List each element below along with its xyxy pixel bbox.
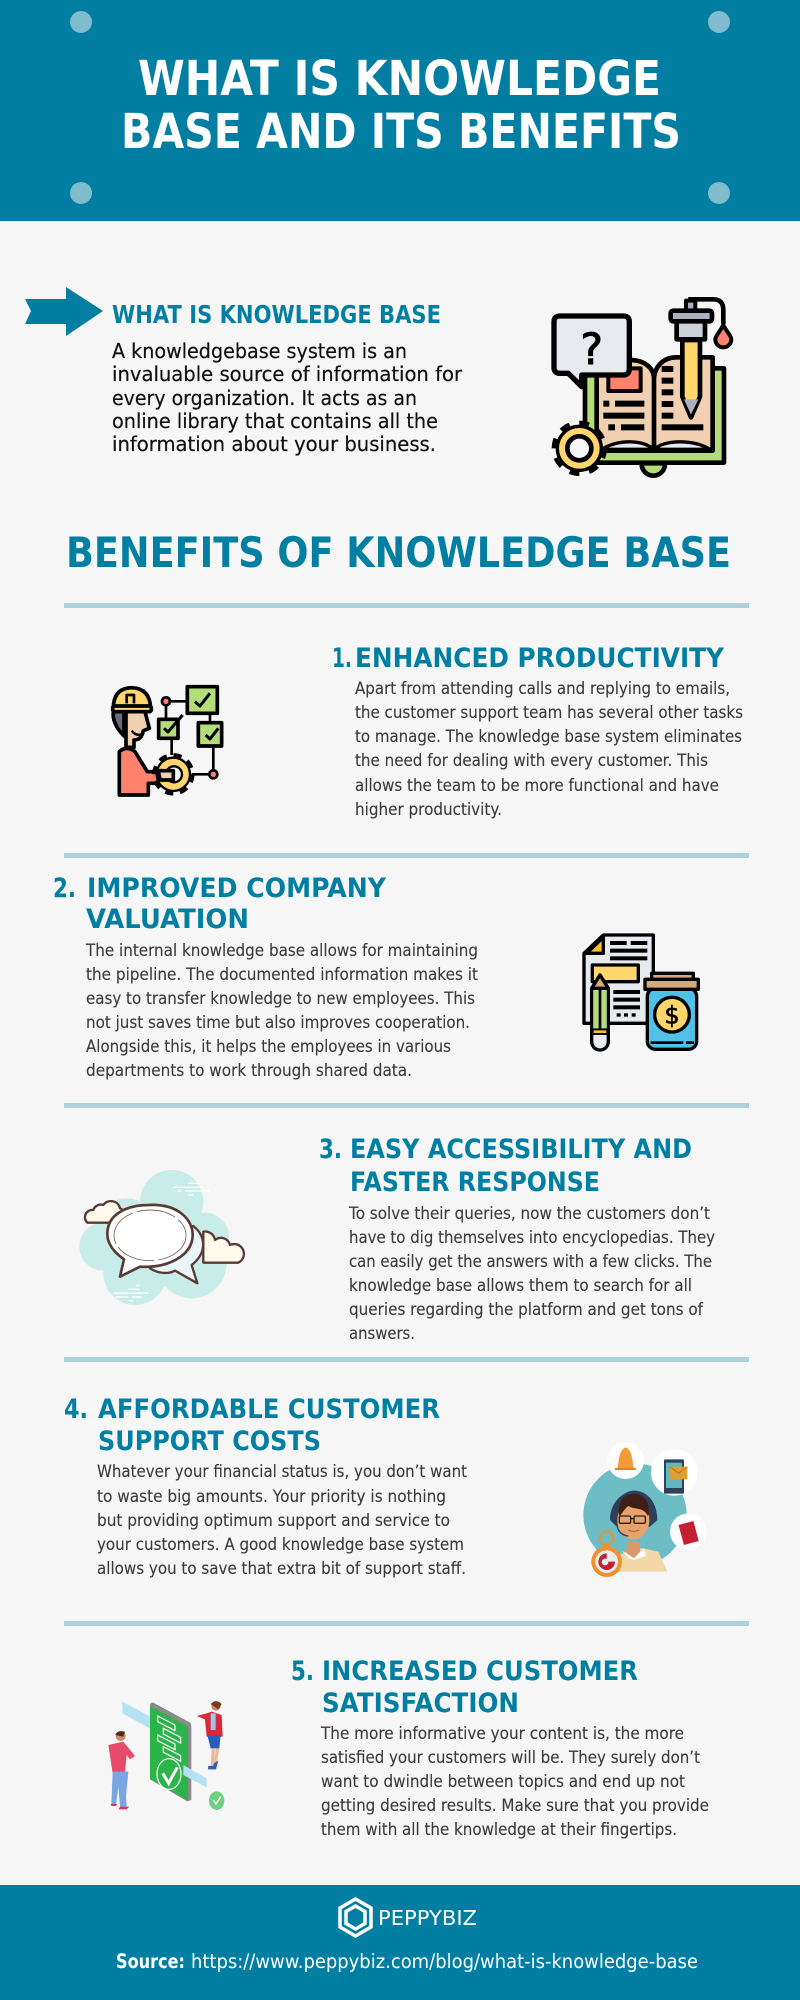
panel: what is knowledge base (25, 287, 731, 476)
benefit 3 text: queries regarding the platform and get tons of (349, 1300, 704, 1320)
icon: document, pencil and coffee cup: $ (664, 1001, 680, 1029)
header banner (0, 0, 800, 221)
panel: benefit 2 (53, 873, 698, 1081)
benefit 1 text: Apart from attending calls and replying to emails, (355, 679, 730, 699)
benefit 5 heading: 5. (291, 1656, 314, 1687)
benefit 1 heading: ENHANCED PRODUCTIVITY (355, 643, 725, 674)
benefit 2 heading (53, 873, 387, 935)
benefit 3 heading (319, 1134, 692, 1198)
title (121, 51, 681, 160)
title: BASE AND ITS BENEFITS (121, 104, 681, 160)
intro heading: WHAT IS KNOWLEDGE BASE (112, 300, 441, 329)
icon: document, pencil and coffee cup (584, 935, 698, 1050)
benefit 3 heading: 3. (319, 1134, 342, 1165)
icon: open book with pen and question: ? (580, 325, 603, 375)
benefit 5 heading: INCREASED CUSTOMER (322, 1656, 638, 1687)
icon: support agent with headset (583, 1442, 707, 1577)
benefit 4 heading: SUPPORT COSTS (98, 1426, 321, 1457)
benefit 1 text: to manage. The knowledge base system eliminates (355, 727, 742, 747)
benefit 1 text: higher productivity. (355, 800, 502, 820)
benefit 2 text: departments to work through shared data. (86, 1061, 412, 1081)
benefit 3 heading: FASTER RESPONSE (350, 1167, 600, 1198)
benefit 5 text: them with all the knowledge at their fingertips. (321, 1820, 677, 1840)
intro text: A knowledgebase system is an (112, 339, 407, 363)
benefit 2 text (85, 941, 478, 1081)
intro text (112, 339, 462, 456)
icon: chat bubbles on cloud (79, 1170, 244, 1305)
benefit 2 text: the pipeline. The documented information makes it (86, 965, 478, 985)
icon: worker with gear and checklist (113, 687, 222, 795)
benefit 3 text: To solve their queries, now the customers don’t (348, 1204, 710, 1224)
benefit 2 heading: VALUATION (86, 904, 249, 935)
benefit 2 text: Alongside this, it helps the employees in various (86, 1037, 451, 1057)
benefit 4 text: allows you to save that extra bit of support staff. (97, 1559, 466, 1579)
benefit 5 text (320, 1724, 709, 1840)
benefit 3 text: can easily get the answers with a few clicks. The (349, 1252, 712, 1272)
benefit 5 text: satisfied your customers will be. They surely don’t (321, 1748, 700, 1768)
benefit 5 heading: SATISFACTION (322, 1688, 519, 1719)
benefit 3 text: answers. (349, 1324, 415, 1344)
source: Source: (116, 1950, 185, 1973)
benefit 4 text: to waste big amounts. Your priority is nothing (97, 1487, 446, 1507)
footer (0, 1885, 800, 2000)
benefit 2 text: not just saves time but also improves cooperation. (86, 1013, 470, 1033)
arrow (25, 287, 103, 336)
benefit 4 text (97, 1462, 467, 1579)
benefit 3 heading: EASY ACCESSIBILITY AND (350, 1134, 692, 1165)
benefit 2 heading: 2. (53, 873, 76, 904)
icon: phone with two people (108, 1701, 224, 1810)
benefit 2 text: easy to transfer knowledge to new employees. This (86, 989, 475, 1009)
benefit 3 text: knowledge base allows them to search for all (349, 1276, 692, 1296)
benefit 4 heading: AFFORDABLE CUSTOMER (98, 1394, 440, 1425)
intro text: information about your business. (112, 432, 436, 456)
source: https://www.peppybiz.com/blog/what-is-knowledge-base (191, 1950, 698, 1973)
decorative dots (70, 11, 730, 204)
intro text: every organization. It acts as an (112, 386, 417, 410)
benefit 4 heading: 4. (64, 1394, 88, 1425)
intro text: online library that contains all the (112, 409, 438, 433)
benefit 4 heading (64, 1394, 440, 1457)
icon: open book with pen and question (554, 299, 731, 476)
brand name: PEPPYBIZ (378, 1906, 477, 1930)
benefit 1 text (355, 679, 743, 820)
benefit 2 heading: IMPROVED COMPANY (87, 873, 387, 904)
intro text: invaluable source of information for (112, 362, 462, 386)
benefit 1 text: allows the team to be more functional and have (355, 776, 719, 796)
panel: benefit 4 (64, 1394, 707, 1579)
benefit 3 text (348, 1204, 715, 1344)
benefit 5 text: The more informative your content is, the more (320, 1724, 684, 1744)
benefit 3 text: have to dig themselves into encyclopedias. They (349, 1228, 715, 1248)
benefit 1 heading: 1. (332, 643, 352, 674)
benefit 5 heading (291, 1656, 638, 1719)
panel: benefit 5 (108, 1656, 709, 1840)
benefit 1 text: the need for dealing with every customer. This (355, 751, 708, 771)
benefit 1 text: the customer support team has several other tasks (355, 703, 743, 723)
title: WHAT IS KNOWLEDGE (138, 51, 661, 107)
benefit 2 text: The internal knowledge base allows for maintaining (85, 941, 478, 961)
benefit 5 text: want to dwindle between topics and end up not (321, 1772, 685, 1792)
benefit 4 text: Whatever your financial status is, you don’t want (97, 1462, 467, 1482)
benefit 4 text: your customers. A good knowledge base system (97, 1535, 464, 1555)
panel: benefit 3 (79, 1134, 715, 1344)
benefit 5 text: getting desired results. Make sure that you provide (321, 1796, 709, 1816)
panel: benefit 1 (113, 643, 743, 820)
benefit 4 text: but providing optimum support and service to (97, 1511, 450, 1531)
logo: peppybiz hexagon (340, 1899, 371, 1936)
